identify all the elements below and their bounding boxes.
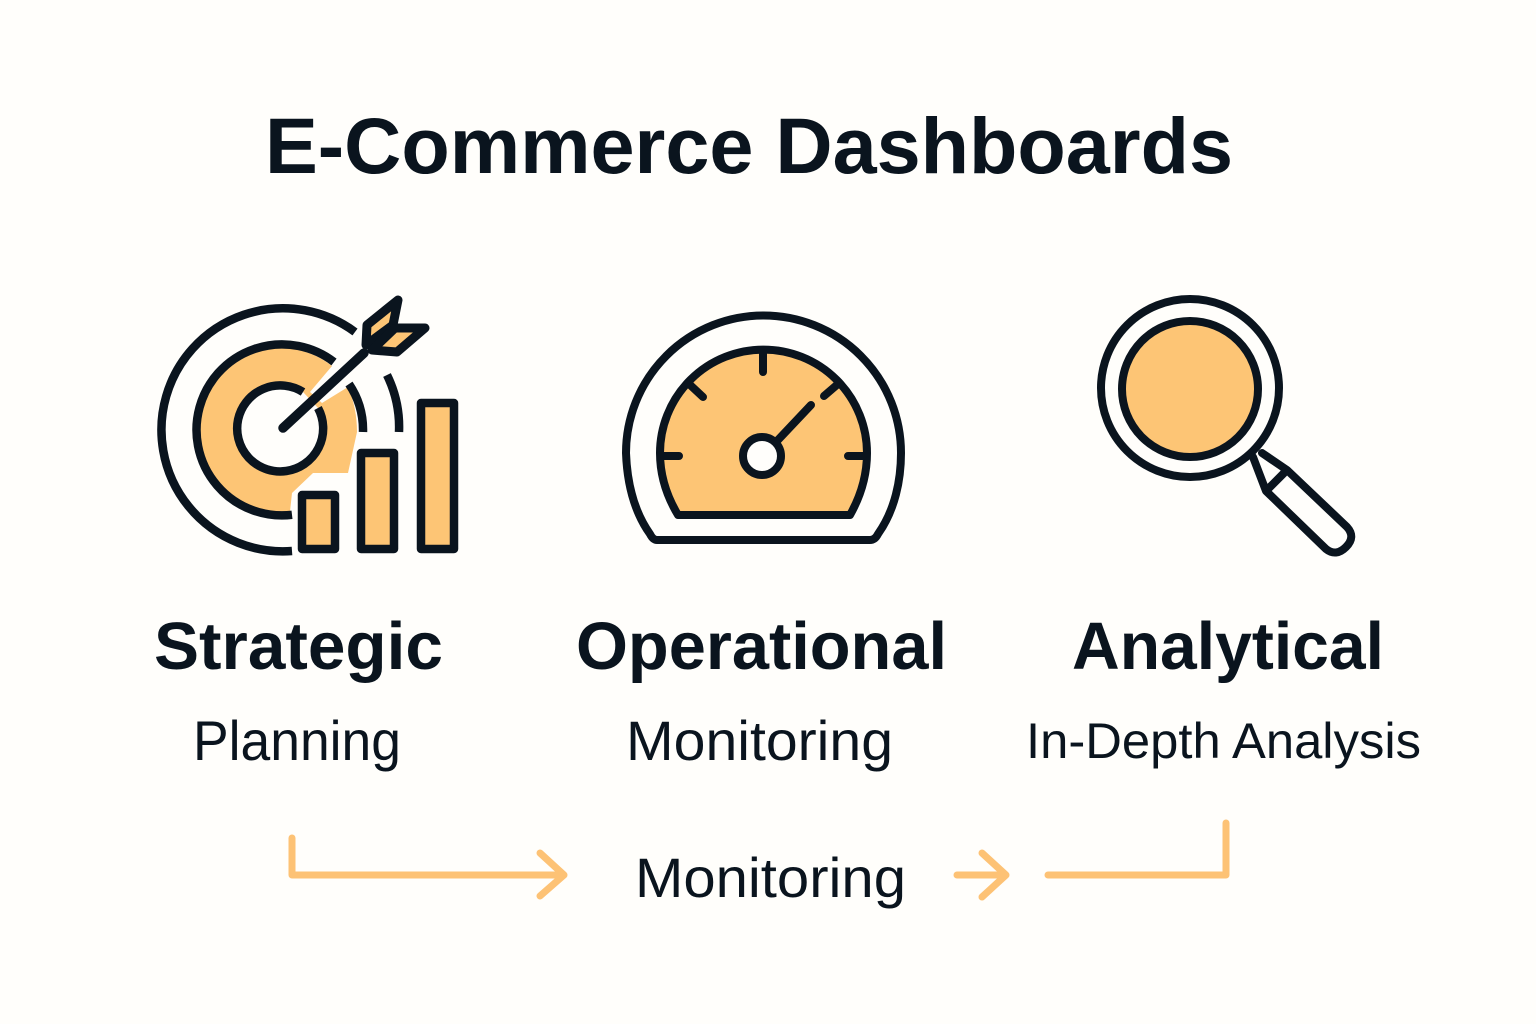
arrow: left flow [292,838,564,896]
title: E-Commerce Dashboards [265,101,1233,190]
text: Planning: Planning [193,709,401,772]
heading: Operational: Operational [576,609,947,684]
text: flow label Monitoring: Monitoring [635,846,906,909]
icon: target with arrow and bars [161,300,454,551]
heading: Analytical: Analytical [1072,609,1384,684]
icon: magnifying glass [1101,299,1351,553]
arrow: middle flow [957,853,1006,897]
text: Monitoring: Monitoring [626,709,893,772]
text: In-Depth Analysis: In-Depth Analysis [1026,713,1421,769]
arrow: right flow [1048,823,1226,875]
heading: Strategic: Strategic [154,609,443,684]
icon: speedometer gauge [626,316,901,540]
